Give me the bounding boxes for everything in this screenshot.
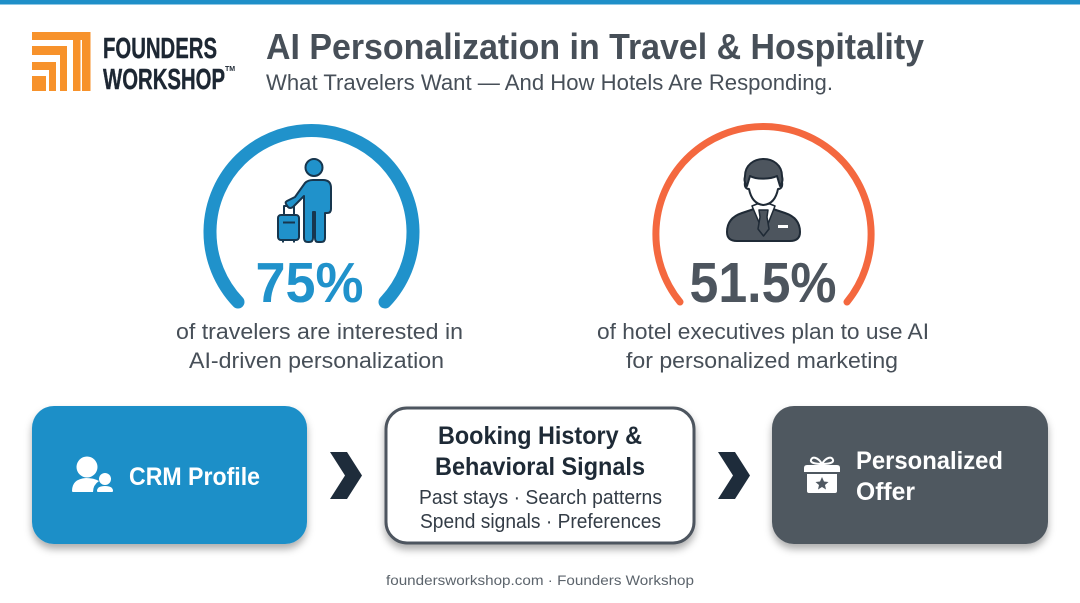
icon: users [72, 456, 113, 492]
card details: Past stays · Search patterns [419, 487, 662, 509]
stat panel: hotel executives [597, 127, 929, 373]
card label: Offer [856, 478, 915, 506]
flow step: Personalized Offer [772, 406, 1048, 544]
card heading: Behavioral Signals [435, 453, 645, 481]
card: slate [772, 406, 1048, 544]
logo wordmark: FOUNDERS [103, 33, 217, 65]
card details: Spend signals · Preferences [420, 511, 661, 533]
card: white outlined [386, 408, 694, 543]
subtitle: What Travelers Want — And How Hotels Are Responding. [266, 70, 833, 95]
card label: Personalized [856, 447, 1003, 475]
card label: CRM Profile [129, 463, 260, 491]
title: AI Personalization in Travel & Hospitality [266, 26, 924, 67]
flow step: Booking History [386, 408, 694, 543]
card heading [435, 422, 645, 481]
card details [419, 487, 662, 533]
footer: foundersworkshop.com · Founders Workshop [386, 572, 694, 588]
stat description: for personalized marketing [626, 348, 898, 373]
stat value: 75%: 75% [256, 251, 364, 315]
flow step: CRM Profile [32, 406, 307, 544]
card heading: Booking History & [438, 422, 642, 450]
stat description [176, 319, 463, 373]
stat panel: travelers [176, 130, 463, 373]
icon: logo mark [32, 32, 90, 91]
icon: gift [804, 458, 840, 493]
gauge arc: orange [656, 127, 871, 302]
arrow 2 [718, 452, 750, 499]
top accent bar [0, 0, 1080, 4]
card label [856, 447, 1003, 506]
logo wordmark [103, 33, 235, 96]
stat description [597, 319, 929, 373]
icon: traveler with suitcase [278, 159, 331, 242]
logo wordmark: TM [225, 66, 235, 73]
card: blue [32, 406, 307, 544]
arrow 1 [330, 452, 362, 499]
stat description: of hotel executives plan to use AI [597, 319, 929, 344]
logo: Founders Workshop [32, 32, 235, 96]
stat description: of travelers are interested in [176, 319, 463, 344]
stat description: AI-driven personalization [189, 348, 444, 373]
gauge arc: blue [210, 130, 413, 302]
icon: businessman [727, 159, 800, 241]
logo wordmark: WORKSHOP [103, 64, 225, 96]
stat value: 51.5%: 51.5% [690, 251, 836, 315]
